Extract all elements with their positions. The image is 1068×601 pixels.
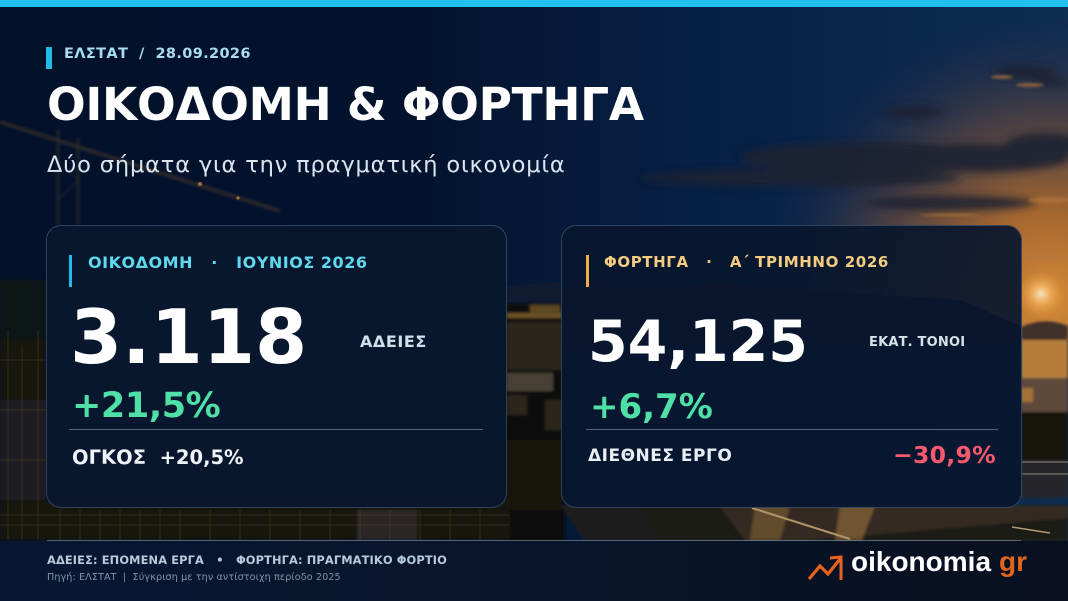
road	[560, 505, 1068, 541]
panel: construction	[46, 225, 507, 508]
sea, port and hills on the right	[1021, 321, 1068, 498]
logo: oikonomia gr	[808, 546, 1027, 580]
panel divider	[586, 429, 998, 430]
left construction strip	[0, 280, 510, 540]
main figure: tonnes: 54,125	[588, 309, 808, 375]
panel accent bar	[69, 255, 72, 287]
panel heading: construction: ΟΙΚΟΔΟΜΗ · ΙΟΥΝΙΟΣ 2026	[88, 253, 368, 272]
header accent marker	[46, 47, 52, 69]
city gap and mountains	[505, 282, 1021, 345]
clouds	[640, 66, 1068, 210]
source and date: ΕΛΣΤΑΤ / 28.09.2026	[64, 46, 251, 62]
wordmark suffix: gr	[999, 546, 1027, 577]
main figure: permits: 3.118	[70, 293, 307, 381]
metric: volume: ΟΓΚΟΣ +20,5%	[72, 446, 244, 469]
title: ΟΙΚΟΔΟΜΗ & ΦΟΡΤΗΓΑ	[47, 78, 644, 131]
unit label: permits: ΑΔΕΙΕΣ	[360, 332, 427, 351]
crane silhouette	[0, 122, 280, 225]
source line: Πηγή: ΕΛΣΤΑΤ | Σύγκριση με την αντίστοιχη περίοδο 2025	[47, 572, 341, 583]
wordmark: oikonomia	[851, 546, 991, 577]
panel heading: freight: ΦΟΡΤΗΓΑ · Α΄ ΤΡΙΜΗΝΟ 2026	[604, 253, 889, 271]
panel accent bar	[586, 255, 589, 287]
metric value: international: −30,9%	[893, 441, 996, 469]
unit label: tonnes: ΕΚΑΤ. ΤΟΝΟΙ	[869, 335, 965, 350]
change: permits: +21,5%	[72, 386, 220, 426]
icon: rising chart arrow	[808, 555, 842, 580]
panel divider	[69, 429, 483, 430]
footer note: ΑΔΕΙΕΣ: ΕΠΟΜΕΝΑ ΕΡΓΑ • ΦΟΡΤΗΓΑ: ΠΡΑΓΜΑΤΙΚΟ ΦΟΡΤΙΟ	[47, 553, 447, 567]
panel: freight	[561, 225, 1022, 508]
top accent bar	[0, 0, 1068, 7]
footer rule	[47, 540, 1021, 541]
subtitle: Δύο σήματα για την πραγματική οικονομία	[47, 152, 566, 178]
metric label: international: ΔΙΕΘΝΕΣ ΕΡΓΟ	[588, 446, 732, 466]
change: tonnes: +6,7%	[590, 387, 713, 427]
